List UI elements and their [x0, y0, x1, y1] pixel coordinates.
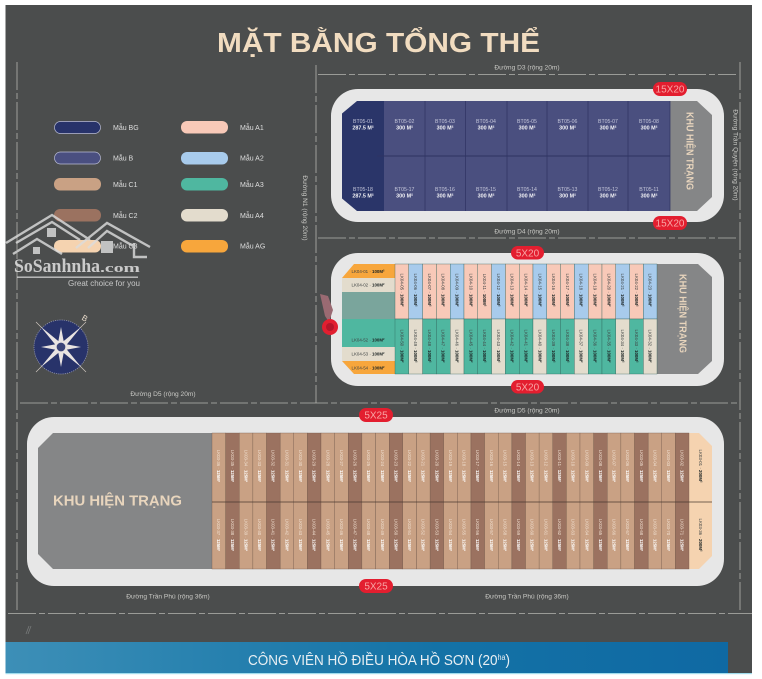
- road labels: Đường Trần Phú (rộng 36m): [485, 592, 569, 600]
- lake banner: CÔNG VIÊN HỒ ĐIỀU HÒA HỒ SƠN (20: [248, 652, 525, 669]
- panel: LK03 block: LK03-15 · 125M²: [502, 450, 508, 483]
- panel: LK04 block: LK04-47 · 100M²: [441, 330, 446, 363]
- panel: LK03 block: LK03-02 · 125M²: [680, 450, 685, 483]
- title: MẶT BẰNG TỔNG THỂ: [217, 27, 540, 58]
- panel: LK03 block: LK03-65 · 125M²: [598, 519, 603, 552]
- road labels: [126, 64, 740, 600]
- panel: LK04 block: LK04-05 · 100M²: [399, 274, 404, 307]
- panel: LK04 block: LK04-22 · 100M²: [634, 274, 639, 307]
- legend: Mẫu A2: [240, 154, 264, 162]
- panel: BT05 block: 300 M²: [641, 194, 658, 200]
- lake banner: ha: [497, 653, 506, 662]
- panel: LK03 block: LK03-30 · 125M²: [298, 450, 303, 483]
- panel: LK03 block: LK03-32 · 125M²: [271, 450, 276, 483]
- panel: LK04 block: LK04-32 · 100M²: [648, 330, 653, 363]
- panel: LK04 block: LK04-23 · 100M²: [648, 274, 653, 307]
- panel: LK04 block: LK04-21 · 100M²: [620, 274, 625, 307]
- panel: LK03 block: LK03-58 · 125M²: [502, 519, 508, 552]
- road labels: Đường Trần Phú (rộng 36m): [126, 592, 210, 600]
- legend: Mẫu A4: [240, 211, 264, 220]
- panel: LK03 block: LK03-25 · 125M²: [366, 450, 371, 483]
- size tags: 5X25: [364, 410, 388, 422]
- watermark: SoSanhnha logo: .com: [100, 261, 141, 275]
- panel: LK04 block: LK04-49 · 100M²: [413, 330, 418, 363]
- panel: LK04 block: LK04-35 · 100M²: [606, 330, 611, 363]
- panel: LK03 block: LK03-09 · 125M²: [584, 450, 589, 483]
- panel: LK03 block: LK03-43 · 125M²: [298, 519, 303, 552]
- panel: BT05 block: 300 M²: [478, 194, 495, 200]
- panel: BT05 block: 300 M²: [641, 126, 658, 132]
- panel: LK03 block: LK03-18 · 125M²: [462, 450, 467, 483]
- legend: Mẫu C3: [113, 242, 138, 250]
- panel: LK04 block: LK04-44 · 100M²: [482, 330, 487, 363]
- panel: LK03 block: LK03-16 · 125M²: [489, 450, 494, 483]
- panel: LK03 block: LK03-20 · 125M²: [434, 450, 439, 483]
- panel: LK03 block: LK03-56 · 125M²: [475, 519, 480, 552]
- panel: LK03 block: LK03-22 · 125M²: [407, 450, 412, 483]
- legend: Mẫu C2: [113, 211, 138, 220]
- panel: LK03 block: LK03-28 · 125M²: [325, 450, 330, 483]
- panel: BT05 block: BT05-01: [353, 119, 373, 125]
- lake banner: [6, 642, 752, 674]
- panel: LK03 block: LK03-21 · 125M²: [421, 450, 426, 483]
- panel: LK03 block: LK03-49 · 125M²: [380, 519, 385, 552]
- panel: LK04 block: LK04-37 · 100M²: [579, 330, 584, 363]
- panel: LK03 block: LK03-07 · 125M²: [612, 450, 616, 483]
- panel: LK04 block: LK04-06 · 100M²: [413, 274, 418, 307]
- panel: LK04 block: LK04-01 · 100M²: [352, 269, 385, 274]
- panel: LK03 block: LK03-12 · 125M²: [543, 450, 548, 483]
- panel: LK03 block: LK03-41 · 125M²: [271, 519, 276, 552]
- panel: LK03 block: LK03-19 · 125M²: [448, 450, 453, 483]
- panel: LK04 block: LK04-15 · 100M²: [537, 274, 542, 307]
- panel: BT05 block: 300 M²: [519, 194, 536, 200]
- size tags: 15X20: [656, 218, 685, 230]
- panel: LK03 block: LK03-35 · 125M²: [230, 450, 235, 483]
- panel: LK03 block: LK03-45 · 125M²: [325, 519, 330, 552]
- panel: BT05 block: BT05-03: [435, 119, 455, 125]
- panel: LK03 block: LK03-51 · 125M²: [407, 519, 412, 552]
- lake banner: ): [505, 652, 510, 669]
- panel: LK03 block: LK03-70 · 125M²: [666, 519, 671, 552]
- panel: BT05 block: BT05-02: [395, 119, 415, 125]
- panel: LK03 block: LK03-39 · 125M²: [244, 519, 248, 552]
- panel: LK04 block: LK04-40 · 100M²: [537, 330, 542, 363]
- panel: LK04 block: LK04-08 · 100M²: [441, 274, 446, 307]
- panel: LK03 block: LK03-71 · 125M²: [680, 519, 685, 552]
- panel: LK03 block: LK03-11 · 125M²: [557, 450, 562, 483]
- panel: BT05 block: BT05-08: [639, 119, 659, 125]
- legend: Mẫu BG: [113, 123, 139, 132]
- watermark: SoSanhnha logo: Great choice for you: [68, 279, 140, 288]
- panel: LK03 block: LK03-63 · 125M²: [571, 519, 576, 552]
- icon: small north mark: [26, 626, 31, 634]
- panel: LK04 block: LK04-14 · 100M²: [524, 274, 528, 307]
- panel: LK03 block: KHU HIỆN TRẠNG: [53, 492, 182, 510]
- panel: LK03 block: LK03-01 · 200M²: [698, 450, 703, 483]
- panel: LK04 block: LK04-41 · 100M²: [524, 330, 528, 363]
- panel: LK03 block: LK03-55 · 125M²: [462, 519, 467, 552]
- panel: LK03 block: LK03-14 · 125M²: [516, 450, 521, 483]
- panel: LK03 block: LK03-50 · 125M²: [393, 519, 398, 552]
- panel: BT05 block: 300 M²: [478, 126, 495, 132]
- road labels: Đường D4 (rộng 20m): [494, 228, 560, 236]
- size tags: 5X25: [364, 582, 388, 592]
- road labels: Đường D5 (rộng 20m): [130, 391, 196, 398]
- panel: BT05 block: BT05-17: [395, 187, 415, 193]
- legend: Mẫu B: [113, 154, 134, 162]
- legend: [54, 121, 265, 252]
- legend: Mẫu A1: [240, 123, 264, 132]
- panel: LK03 block: LK03-04 · 125M²: [652, 450, 657, 483]
- panel: BT05 block: 300 M²: [600, 126, 617, 132]
- panel: LK03 block: LK03-68 · 125M²: [639, 519, 644, 552]
- panel: LK03 block: [27, 417, 724, 586]
- panel: LK03 block: LK03-36 · 200M²: [698, 519, 703, 552]
- panel: LK03 block: LK03-03 · 125M²: [666, 450, 671, 483]
- panel: LK03 block: LK03-10 · 125M²: [571, 450, 576, 483]
- panel: LK04 block: KHU HIỆN TRẠNG: [676, 274, 690, 353]
- panel: LK04 block: LK04-52 · 100M²: [352, 338, 385, 342]
- icon: compass: B: [80, 313, 89, 324]
- panel: LK04 block: LK04-42 · 100M²: [510, 330, 515, 363]
- panel: LK04 block: LK04-48 · 100M²: [427, 330, 432, 363]
- size tags: 15X20: [656, 84, 685, 96]
- panel: LK04 block: LK04-11 · 100M²: [482, 274, 487, 307]
- watermark: SoSanhnha logo: [6, 215, 150, 288]
- panel: LK03 block: LK03-17 · 125M²: [475, 450, 480, 483]
- road labels: Đường Trần Quyện (rộng 20m): [732, 109, 740, 201]
- size tags: [359, 82, 687, 593]
- watermark: SoSanhnha logo: SoSanhnha: [14, 257, 100, 277]
- panel: LK04 block: LK04-09 · 100M²: [454, 274, 460, 307]
- panel: LK03 block: LK03-34 · 125M²: [244, 450, 248, 483]
- panel: LK03 block: LK03-23 · 125M²: [393, 450, 398, 483]
- size tags: 5X20: [516, 382, 540, 394]
- panel: LK03 block: LK03-38 · 125M²: [230, 519, 235, 552]
- panel: BT05 block: 300 M²: [600, 194, 617, 200]
- panel: LK03 block: LK03-46 · 125M²: [339, 519, 344, 552]
- icon: red location marker: [320, 294, 338, 335]
- panel: LK03 block: LK03-05 · 125M²: [639, 450, 644, 483]
- panel: LK04 block: [331, 253, 724, 386]
- road labels: Đường N1 (rộng 20m): [301, 175, 308, 241]
- panel: BT05 block: BT05-04: [476, 119, 496, 125]
- panel: LK03 block: LK03-52 · 125M²: [421, 519, 426, 552]
- panel: LK03 block: LK03-67 · 125M²: [625, 519, 630, 552]
- panel: LK03 block: LK03-61 · 125M²: [543, 519, 548, 552]
- panel: LK04 block: LK04-38 · 100M²: [565, 330, 570, 363]
- legend: Mẫu AG: [240, 242, 265, 250]
- panel: LK04 block: LK04-36 · 100M²: [592, 330, 598, 363]
- panel: BT05 block: BT05-16: [435, 187, 455, 193]
- panel: BT05 block: BT05-05: [517, 119, 537, 125]
- panel: LK03 block: LK03-31 · 125M²: [284, 450, 289, 483]
- panel: BT05 block: 300 M²: [437, 194, 454, 200]
- panel: LK04 block: LK04-07 · 100M²: [427, 274, 432, 307]
- panel: LK03 block: LK03-47 · 125M²: [352, 519, 358, 552]
- panel: LK04 block: LK04-20 · 100M²: [606, 274, 611, 307]
- road labels: Đường D3 (rộng 20m): [494, 64, 560, 72]
- panel: LK03 block: LK03-53 · 125M²: [434, 519, 439, 552]
- panel: LK04 block: LK04-16 · 100M²: [551, 274, 556, 307]
- panel: BT05 block: BT05-15: [476, 187, 496, 193]
- panel: LK03 block: LK03-08 · 125M²: [598, 450, 603, 483]
- panel: LK04 block: LK04-53 · 100M²: [352, 352, 385, 356]
- panel: BT05 block: BT05-11: [639, 187, 659, 193]
- panel: BT05 block: BT05-12: [598, 187, 618, 193]
- panel: BT05 block: 300 M²: [559, 194, 576, 200]
- icon: compass: [34, 313, 89, 374]
- panel: BT05 block: 287.5 M²: [352, 194, 374, 200]
- panel: BT05 block: KHU HIỆN TRẠNG: [684, 112, 696, 190]
- panel: LK03 block: LK03-33 · 125M²: [257, 450, 262, 483]
- panel: LK03 block: LK03-27 · 125M²: [339, 450, 344, 483]
- panel: LK03 block: LK03-26 · 125M²: [352, 450, 358, 483]
- panel: LK04 block: LK04-54 · 100M²: [352, 366, 385, 370]
- panel: BT05 block: 300 M²: [559, 126, 576, 132]
- panel: BT05 block: BT05-06: [558, 119, 578, 125]
- panel: BT05 block: 300 M²: [437, 126, 454, 132]
- panel: LK04 block: LK04-19 · 100M²: [592, 274, 598, 307]
- panel: LK03 block: LK03-40 · 125M²: [257, 519, 262, 552]
- panel: BT05 block: 300 M²: [396, 194, 413, 200]
- panel: LK03 block: LK03-44 · 125M²: [312, 519, 317, 552]
- panel: LK04 block: LK04-43 · 100M²: [496, 330, 501, 363]
- panel: LK04 block: LK04-18 · 100M²: [579, 274, 584, 307]
- panel: LK03 block: LK03-48 · 125M²: [366, 519, 371, 552]
- legend: Mẫu C1: [113, 180, 138, 189]
- panel: LK03 block: LK03-57 · 125M²: [489, 519, 494, 552]
- panel: LK03 block: LK03-66 · 125M²: [612, 519, 616, 552]
- panel: LK04 block: LK04-12 · 100M²: [496, 274, 501, 307]
- panel: LK03 block: LK03-06 · 125M²: [625, 450, 630, 483]
- panel: BT05 block: BT05-13: [558, 187, 578, 193]
- panel: LK03 block: LK03-36 · 125M²: [216, 450, 221, 483]
- panel: LK04 block: LK04-02 · 100M²: [352, 282, 385, 288]
- panel: LK03 block: LK03-37 · 125M²: [216, 519, 221, 552]
- panel: LK03 block: LK03-60 · 125M²: [530, 519, 535, 552]
- panel: LK03 block: LK03-42 · 125M²: [284, 519, 289, 552]
- panel: BT05 block: 300 M²: [519, 126, 536, 132]
- panel: BT05 block: BT05-18: [353, 187, 373, 193]
- panel: LK04 block: LK04-33 · 100M²: [634, 330, 639, 363]
- size tags: 5X20: [516, 248, 540, 260]
- panel: LK04 block: LK04-13 · 100M²: [510, 274, 515, 307]
- panel: LK04 block: LK04-39 · 100M²: [551, 330, 556, 363]
- panel: LK03 block: LK03-62 · 125M²: [557, 519, 562, 552]
- panel: BT05 block: 300 M²: [396, 126, 413, 132]
- panel: BT05 block: BT05-14: [517, 187, 537, 193]
- panel: LK04 block: LK04-50 · 100M²: [399, 330, 404, 363]
- panel: BT05 block: [331, 89, 724, 222]
- panel: LK03 block: LK03-64 · 125M²: [584, 519, 589, 552]
- panel: LK03 block: LK03-13 · 125M²: [530, 450, 535, 483]
- panel: LK04 block: LK04-34 · 100M²: [620, 330, 625, 363]
- panel: LK04 block: LK04-17 · 100M²: [565, 274, 570, 307]
- panel: LK03 block: LK03-54 · 125M²: [448, 519, 453, 552]
- panel: BT05 block: 287.5 M²: [352, 126, 374, 132]
- panel: LK04 block: LK04-45 · 100M²: [468, 330, 473, 363]
- panel: LK04 block: LK04-10 · 100M²: [468, 274, 473, 307]
- panel: LK03 block: LK03-69 · 125M²: [652, 519, 657, 552]
- panel: LK03 block: LK03-24 · 125M²: [380, 450, 385, 483]
- legend: Mẫu A3: [240, 180, 264, 189]
- panel: BT05 block: BT05-07: [598, 119, 618, 125]
- road labels: Đường D5 (rộng 20m): [494, 408, 560, 414]
- panel: LK03 block: LK03-29 · 125M²: [312, 450, 317, 483]
- panel: LK03 block: LK03-59 · 125M²: [516, 519, 521, 552]
- panel: LK04 block: LK04-46 · 100M²: [454, 330, 460, 363]
